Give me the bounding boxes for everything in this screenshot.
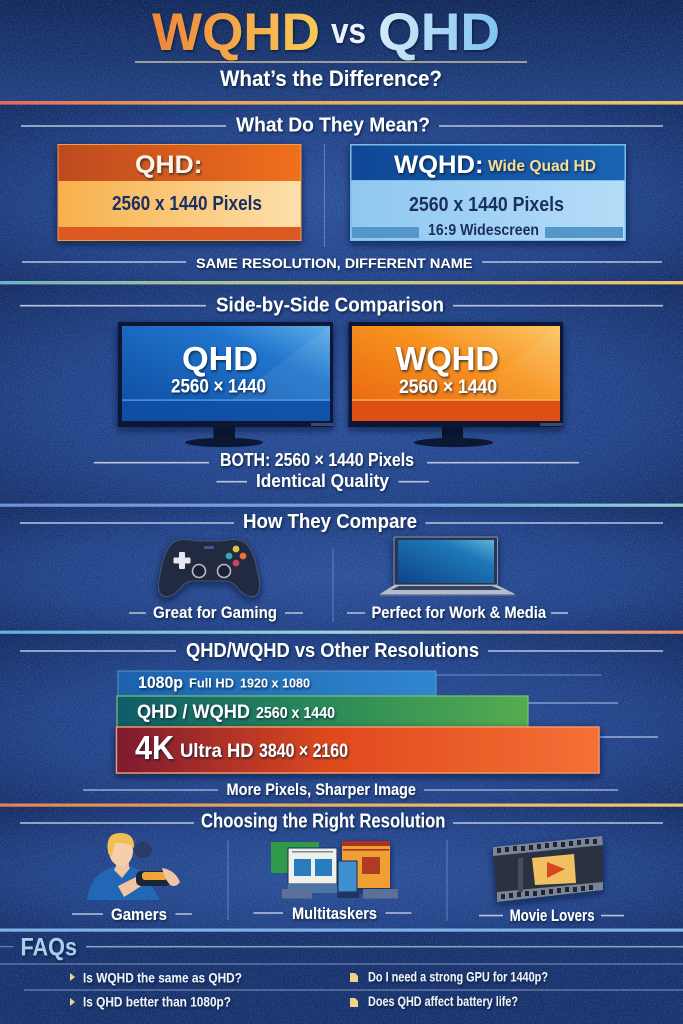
bar: 1080p: 1080p (138, 674, 183, 692)
panel: how they compare (20, 511, 663, 622)
bar: 1080p: 1920 x 1080 (240, 676, 310, 690)
title: WQHD vs QHD (152, 3, 500, 62)
faq: better than 1080p: Is QHD better than 1080p? (83, 994, 231, 1010)
icon: gamer (87, 833, 180, 900)
icon: game controller (158, 533, 260, 597)
caption: same resolution: SAME RESOLUTION, DIFFERENT NAME (196, 255, 472, 271)
card: WQHD: 2560 x 1440 Pixels (409, 194, 564, 216)
panel: choosing the right resolution (20, 811, 663, 925)
heading: what do they mean: What Do They Mean? (236, 114, 430, 136)
caption: both resolutions: BOTH: 2560 × 1440 Pixels (220, 450, 414, 470)
bar: 4K: 3840 × 2160 (259, 741, 348, 762)
label: multitaskers: Multitaskers (292, 904, 377, 923)
heading: FAQs: FAQs (20, 934, 77, 962)
card: WQHD: Wide Quad HD (488, 158, 596, 175)
card: QHD (58, 144, 302, 241)
card: QHD: 2560 x 1440 Pixels (112, 193, 262, 215)
bar: 1080p (118, 671, 436, 696)
icon: laptop (380, 537, 515, 596)
title: WQHD vs QHD: QHD (378, 3, 500, 62)
bar: QHD / WQHD: QHD / WQHD (137, 702, 250, 723)
heading: choosing: Choosing the Right Resolution (201, 811, 446, 833)
title: WQHD vs QHD: vs (331, 10, 366, 51)
bar: 1080p: Full HD (189, 676, 234, 690)
monitor: QHD: QHD (182, 340, 258, 377)
label: gamers: Gamers (111, 905, 167, 924)
monitor: WQHD (348, 322, 563, 447)
bar: 4K: Ultra HD (180, 741, 254, 762)
header: title block (135, 3, 527, 91)
heading: side-by-side: Side-by-Side Comparison (216, 294, 444, 316)
heading: other resolutions: QHD/WQHD vs Other Resolutions (186, 640, 479, 662)
card: WQHD: 16:9 Widescreen (428, 222, 539, 239)
heading: how they compare: How They Compare (243, 511, 417, 533)
title: WQHD vs QHD: WQHD (152, 3, 320, 62)
bar: QHD / WQHD (117, 696, 528, 727)
card: WQHD: WQHD: (394, 151, 484, 179)
caption: identical quality: Identical Quality (256, 471, 389, 491)
panel: FAQs (0, 934, 683, 1010)
faq: battery life: Does QHD affect battery life? (368, 993, 518, 1009)
label: movie lovers: Movie Lovers (510, 906, 595, 925)
panel: what do they mean (21, 114, 663, 271)
card: WQHD (350, 144, 626, 241)
card: QHD: QHD: (135, 151, 202, 179)
monitor: WQHD: WQHD (396, 340, 499, 377)
label: great for gaming: Great for Gaming (153, 603, 277, 622)
monitor: QHD (118, 322, 333, 447)
label: perfect for work and media: Perfect for Work & Media (372, 603, 546, 622)
bar: QHD / WQHD: 2560 x 1440 (256, 705, 335, 722)
bar: 4K: 4K (135, 729, 174, 766)
caption: more pixels: More Pixels, Sharper Image (226, 780, 416, 799)
bar: 4K (116, 727, 599, 773)
monitor: WQHD: 2560 × 1440 (399, 377, 497, 398)
panel: side-by-side comparison (20, 294, 663, 491)
icon: multitasking windows (271, 841, 398, 898)
icon: film strip (493, 836, 603, 902)
faq: same as QHD: Is WQHD the same as QHD? (83, 970, 242, 986)
subtitle: What’s the Difference? (220, 66, 442, 91)
faq: strong GPU: Do I need a strong GPU for 1440p? (368, 969, 548, 985)
panel: other resolutions (20, 640, 663, 799)
monitor: QHD: 2560 × 1440 (171, 376, 266, 398)
